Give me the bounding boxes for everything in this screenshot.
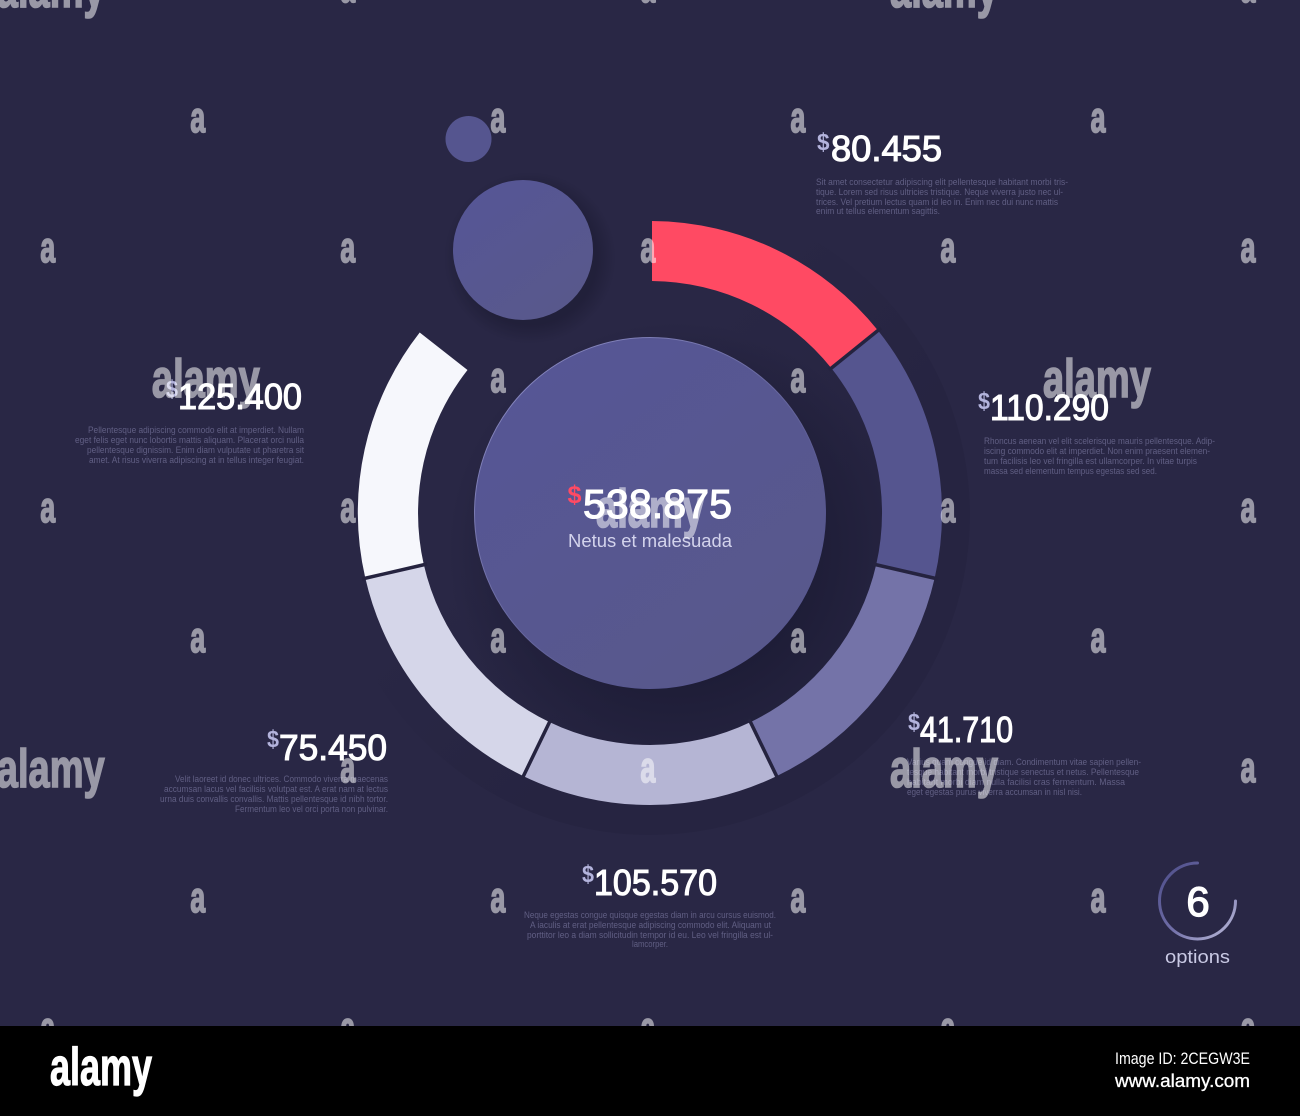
watermark pattern: a — [791, 354, 806, 402]
watermark pattern: a — [1241, 224, 1256, 272]
watermark pattern: a — [640, 224, 656, 272]
small floating circle — [446, 116, 492, 162]
label: 75.450: Velit laoreet id donec ultrices. Commodo viverra maecenas — [175, 774, 388, 784]
segment: 125.400 near white — [358, 332, 468, 578]
website: www.alamy.com — [1114, 1071, 1250, 1091]
watermark pattern: a — [1241, 744, 1256, 792]
center total — [568, 481, 733, 551]
image id: Image ID: 2CEGW3E — [1115, 1049, 1250, 1068]
footer logo: alamy — [50, 1038, 152, 1097]
center total: Netus et malesuada — [568, 531, 733, 551]
label: 41.710: $ — [908, 709, 921, 736]
watermark pattern: a — [190, 94, 206, 142]
label: 80.455: Sit amet consectetur adipiscing elit pellentesque habitant morbi tris- — [816, 177, 1068, 187]
label: 41.710 — [907, 709, 1141, 797]
ring drop shadow halo — [330, 195, 970, 835]
center disc — [474, 338, 826, 688]
label: 105.570: Neque egestas congue quisque egestas diam in arcu cursus euismod. — [524, 910, 776, 920]
watermark pattern: a — [340, 744, 356, 792]
label: 75.450: 75.450 — [279, 727, 387, 768]
label: 125.400: 125.400 — [178, 376, 302, 417]
watermark pattern: a — [791, 614, 806, 662]
watermark pattern: a — [1091, 94, 1106, 142]
label: 80.455: $ — [817, 129, 830, 156]
badge: 6 options — [1160, 863, 1236, 967]
label: 41.710: tesque habitant morbi tristique senectus et netus. Pellentesque — [907, 767, 1139, 777]
watermark pattern: alamy — [0, 738, 105, 799]
label: 105.570 — [524, 861, 776, 949]
watermark pattern: a — [640, 1004, 656, 1052]
watermark pattern: a — [340, 484, 356, 532]
label: 110.290: $ — [978, 388, 991, 415]
label: 75.450: urna duis convallis convallis. Mattis pellentesque id nibh tortor. — [160, 794, 388, 804]
watermark pattern: a — [340, 1004, 356, 1052]
watermark pattern: a — [1241, 484, 1256, 532]
watermark pattern: a — [1241, 1004, 1256, 1052]
label: 75.450 — [160, 726, 388, 814]
center disc shadow — [448, 322, 904, 778]
label: 105.570: lamcorper. — [632, 939, 668, 949]
label: 125.400: Pellentesque adipiscing commodo elit at imperdiet. Nullam — [88, 425, 304, 435]
label: 105.570: 105.570 — [594, 862, 717, 903]
badge: 6 options: 6 — [1186, 878, 1210, 925]
watermark pattern: a — [490, 874, 506, 922]
pie chart — [330, 195, 970, 835]
label: 80.455: 80.455 — [831, 128, 942, 169]
segment: 105.570 lavender — [523, 722, 777, 805]
watermark pattern: a — [490, 354, 506, 402]
label: 110.290 — [978, 387, 1215, 476]
watermark pattern: a — [490, 614, 506, 662]
label: 125.400 — [75, 376, 304, 465]
label: 75.450: accumsan lacus vel facilisis volutpat est. A erat nam at lectus — [164, 784, 388, 794]
footer bar — [0, 1026, 1300, 1116]
watermark pattern: a — [941, 1004, 956, 1052]
label: 75.450: Fermentum leo vel orci porta non pulvinar. — [235, 804, 388, 814]
watermark pattern: alamy — [890, 738, 998, 799]
label: 80.455: tique. Lorem sed risus ultricies tristique. Neque viverra justo nec ul- — [816, 187, 1063, 197]
detached slice circle — [444, 172, 616, 344]
label: 105.570: $ — [582, 861, 595, 888]
badge: 6 options: options — [1165, 947, 1230, 967]
label: 110.290: massa sed elementum tempus egestas sed sed. — [984, 466, 1157, 476]
label: 110.290: tum facilisis leo vel fringilla est ullamcorper. In vitae turpis — [984, 456, 1197, 466]
watermark pattern: alamy — [1043, 348, 1151, 409]
watermark pattern: a — [791, 94, 806, 142]
label: 125.400: $ — [166, 376, 179, 403]
watermark pattern: a — [941, 484, 956, 532]
watermark pattern: alamy — [596, 478, 704, 539]
watermark pattern: a — [40, 224, 56, 272]
label: 125.400: pellentesque dignissim. Enim diam vulputate ut pharetra sit — [87, 445, 304, 455]
watermark pattern: a — [941, 224, 956, 272]
center total: $ — [568, 481, 582, 509]
watermark pattern: a — [1091, 874, 1106, 922]
label: 41.710: habitant morbi diam nulla facilisi cras fermentum. Massa — [907, 777, 1125, 787]
label: 75.450: $ — [267, 726, 280, 753]
watermark pattern: alamy — [152, 348, 260, 409]
watermark pattern: a — [490, 94, 506, 142]
label: 41.710: Varius quam congue id diam. Condimentum vitae sapien pellen- — [907, 757, 1141, 767]
label: 105.570: A iaculis at erat pellentesque adipiscing commodo elit. Aliquam ut — [530, 920, 771, 930]
watermark pattern: a — [791, 874, 806, 922]
label: 41.710: eget egestas purus viverra accumsan in nisl nisi. — [907, 787, 1082, 797]
label: 110.290: iscing commodo elit at imperdiet. Non enim praesent elemen- — [984, 446, 1210, 456]
watermark pattern: a — [1091, 614, 1106, 662]
label: 80.455: enim ut tellus elementum sagittis. — [816, 206, 940, 216]
watermark pattern: a — [40, 1004, 56, 1052]
segment: 75.450 pale lavender — [365, 565, 549, 776]
watermark pattern: a — [640, 744, 656, 792]
label: 80.455: trices. Vel pretium lectus quam id leo in. Enim nec dui nunc mattis — [816, 197, 1058, 207]
label: 125.400: eget felis eget nunc lobortis mattis aliquam. Placerat orci nulla — [75, 435, 304, 445]
watermark pattern: a — [40, 484, 56, 532]
label: 105.570: porttitor leo a diam sollicitudin tempor id eu. Leo vel fringilla est ul- — [527, 930, 773, 940]
label: 80.455 — [816, 128, 1068, 216]
label: 41.710: 41.710 — [920, 709, 1013, 750]
label: 110.290: 110.290 — [990, 387, 1109, 428]
watermark pattern: a — [190, 614, 206, 662]
watermark pattern: a — [190, 874, 206, 922]
segment: 80.455 red — [652, 221, 878, 368]
label: 110.290: Rhoncus aenean vel elit scelerisque mauris pellentesque. Adip- — [984, 436, 1215, 446]
center total: 538.875 — [583, 481, 732, 527]
label: 125.400: amet. At risus viverra adipiscing at in tellus integer feugiat. — [89, 455, 304, 465]
segment: 110.290 indigo — [831, 331, 942, 578]
watermark pattern: a — [340, 224, 356, 272]
segment: 41.710 muted violet — [751, 565, 935, 776]
